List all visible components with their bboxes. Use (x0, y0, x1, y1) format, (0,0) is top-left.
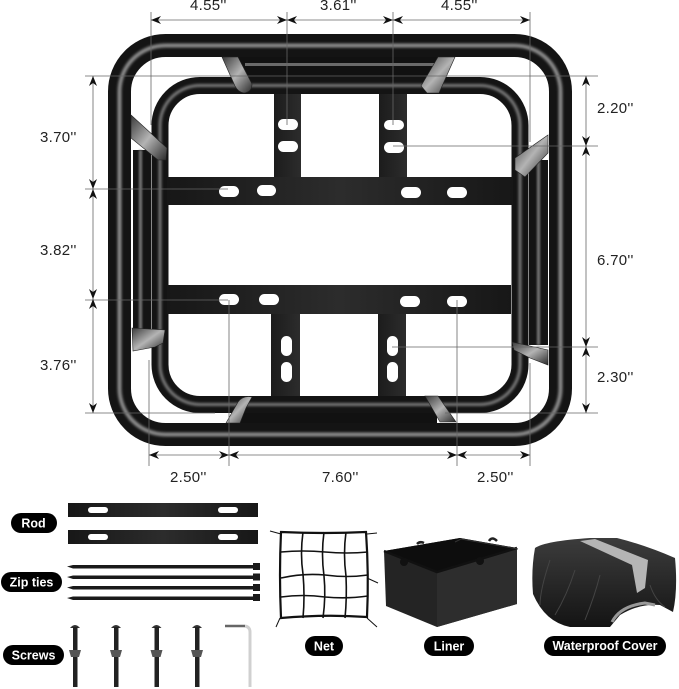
top and bottom rail tubes (232, 56, 443, 423)
label: Screws (3, 645, 64, 665)
label: Liner (424, 636, 474, 656)
label: Rod (11, 513, 57, 533)
vertical mounting tabs (271, 94, 407, 396)
dimension labels: 2.30'' (597, 369, 634, 386)
weld brackets (131, 57, 548, 423)
label: Net (305, 636, 343, 656)
label: Waterproof Cover: Waterproof Cover (552, 639, 658, 653)
side rail tubes (133, 150, 548, 345)
inner tube (160, 86, 520, 404)
net (270, 531, 378, 627)
label: Screws: Screws (12, 648, 55, 662)
rods (68, 503, 258, 544)
screws (69, 625, 203, 687)
label: Rod: Rod (21, 516, 46, 530)
dimension arrowheads (89, 16, 590, 459)
dimension labels: 3.70'' (40, 129, 77, 146)
dimension labels: 2.50'' (170, 469, 207, 486)
dimension labels (40, 0, 634, 486)
dimension labels: 2.20'' (597, 100, 634, 117)
dimension labels: 7.60'' (322, 469, 359, 486)
waterproof cover (532, 538, 676, 627)
slots (219, 119, 467, 382)
dimension lines (85, 12, 598, 466)
liner (384, 538, 518, 627)
zip ties (67, 563, 260, 601)
dimension labels: 2.50'' (477, 469, 514, 486)
horizontal bars (167, 177, 513, 314)
dimension labels: 6.70'' (597, 252, 634, 269)
label: Zip ties: Zip ties (10, 576, 53, 590)
dimension labels: 3.76'' (40, 357, 77, 374)
outer tube (120, 46, 560, 434)
label: Waterproof Cover (544, 636, 666, 656)
label: Net: Net (314, 640, 335, 654)
label: Liner: Liner (434, 640, 464, 654)
label: Zip ties (1, 572, 62, 592)
dimension labels: 3.82'' (40, 242, 77, 259)
allen key (225, 626, 250, 687)
rack frame (120, 46, 560, 434)
